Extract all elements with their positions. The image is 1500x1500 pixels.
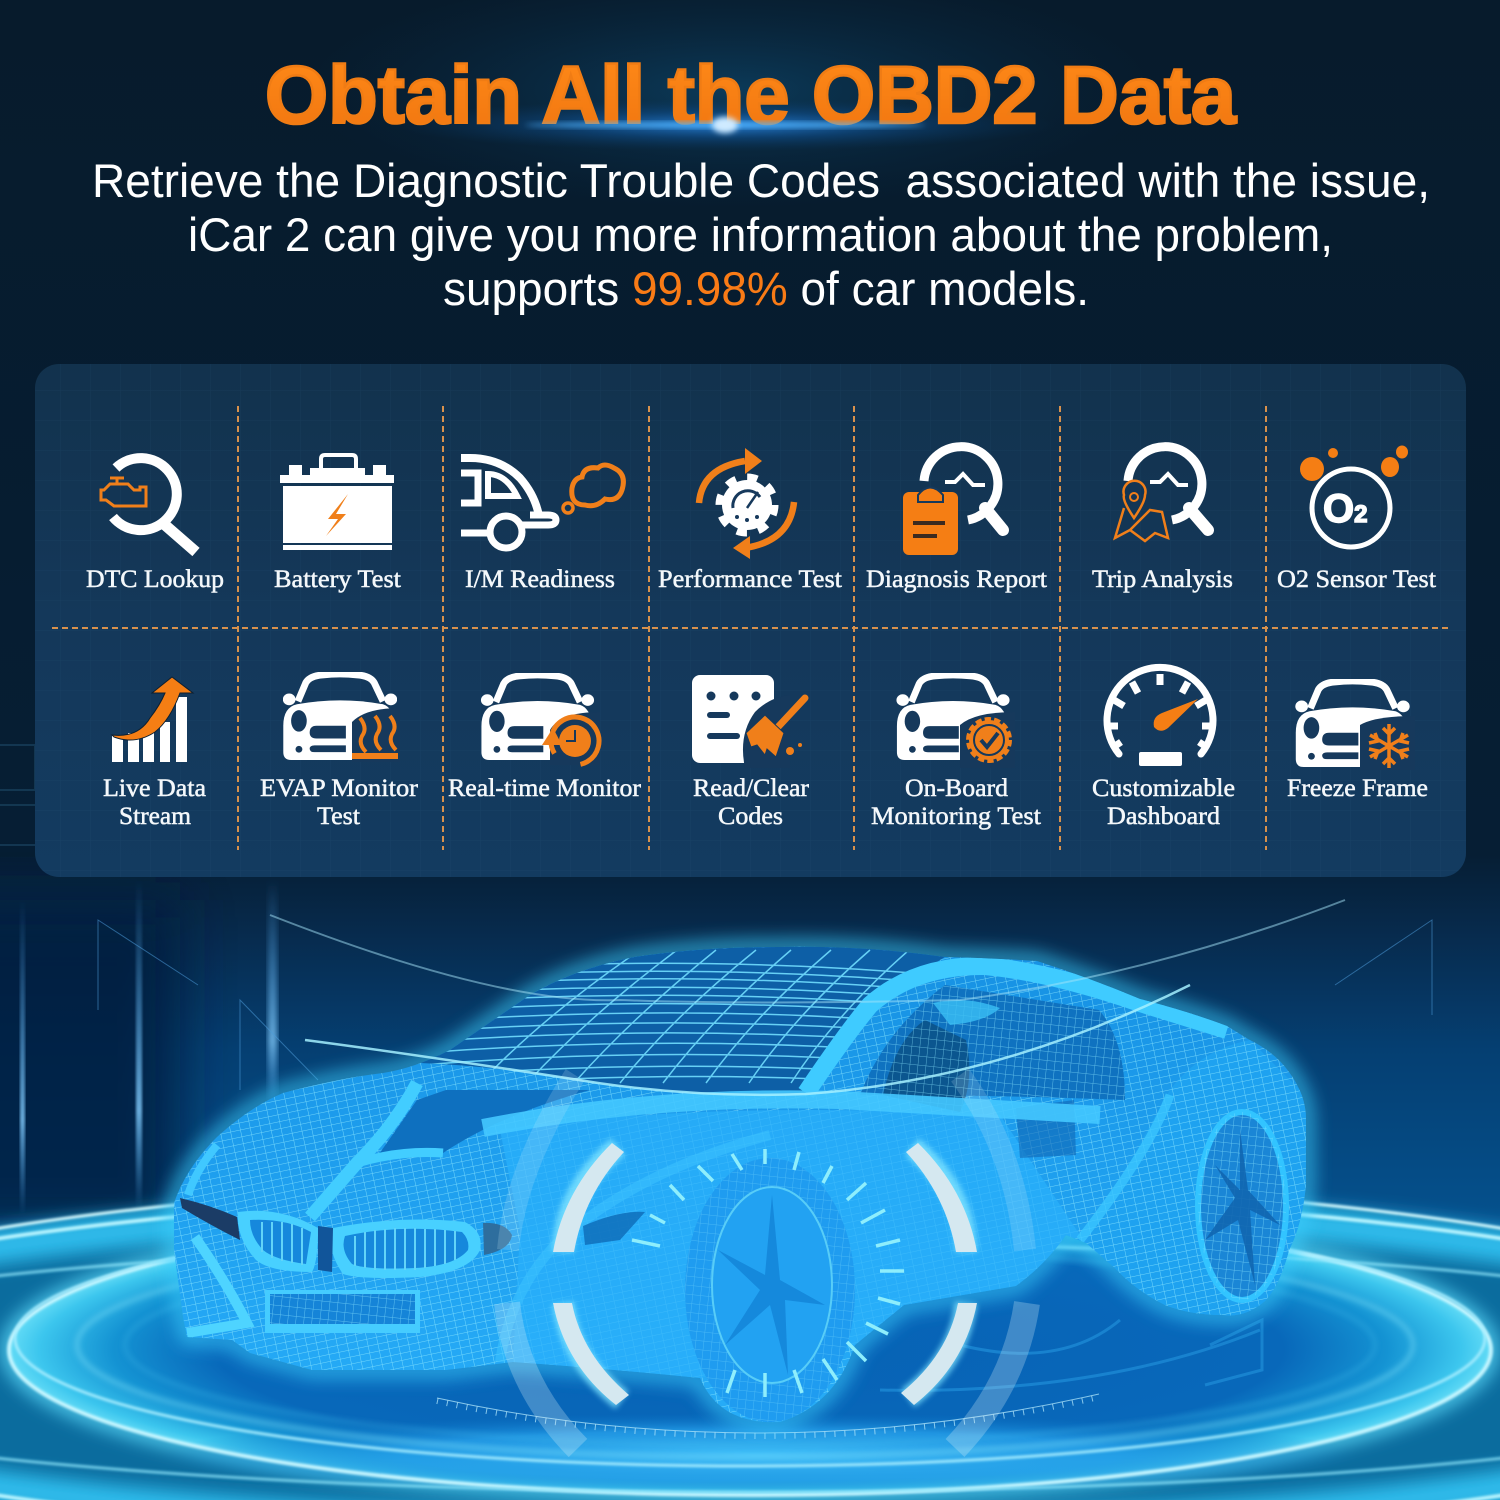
icon: trip analysis [1115, 447, 1208, 541]
floor tick arc [437, 1394, 1099, 1436]
label: I/M Readiness: I/M Readiness [465, 566, 615, 593]
HUD arcs and scanner [270, 900, 1345, 1448]
label: EVAP Monitor Test: EVAP Monitor [260, 775, 419, 802]
windshield [421, 946, 944, 1094]
icon: read clear codes [692, 675, 805, 768]
label: DTC Lookup: DTC Lookup [86, 566, 224, 593]
hood dark wedge [377, 1090, 590, 1157]
label: Live Data Stream [103, 775, 206, 830]
icon: DTC lookup [101, 458, 196, 552]
bright lower body [500, 1110, 1080, 1378]
rear haunch [1088, 1040, 1320, 1320]
label: Freeze Frame: Freeze Frame [1287, 775, 1428, 802]
icon: O2 sensor [1300, 446, 1408, 547]
headlights [180, 1198, 240, 1240]
label: O2 Sensor Test: O2 Sensor Test [1277, 566, 1436, 593]
label: Customizable Dashboard: Customizable [1092, 775, 1235, 802]
label: Trip Analysis: Trip Analysis [1092, 566, 1233, 593]
title flare back [395, 99, 1055, 151]
label: Battery Test: Battery Test [274, 566, 401, 593]
label: EVAP Monitor Test: Test [317, 803, 360, 830]
icon: diagnosis report [903, 447, 1003, 555]
floor rings [0, 1177, 1500, 1500]
label: Live Data Stream: Live Data [103, 775, 206, 802]
icon: customizable dashboard [1106, 667, 1214, 766]
icon: battery [280, 455, 394, 550]
label: Read/Clear Codes: Codes [718, 803, 783, 830]
label: Performance Test: Performance Test [658, 566, 842, 593]
icon: EVAP monitor [283, 674, 400, 762]
subtitle: iCar 2 can give you more information about the problem, [188, 208, 1333, 261]
grille [238, 1211, 481, 1278]
icon: on-board monitoring [896, 675, 1015, 768]
label: On-Board Monitoring Test: Monitoring Test [871, 803, 1041, 830]
icon: real-time monitor [481, 675, 608, 774]
label: On-Board Monitoring Test: On-Board [905, 775, 1009, 802]
label: On-Board Monitoring Test [871, 775, 1041, 830]
subtitle: supports 99.98% of car models. [443, 262, 1089, 315]
icon: live data stream [112, 677, 193, 762]
label: Real-time Monitor: Real-time Monitor [448, 775, 642, 802]
bright bands [806, 966, 1227, 1093]
label: Customizable Dashboard: Dashboard [1107, 803, 1221, 830]
front wheel [685, 1158, 855, 1422]
label: Live Data Stream: Stream [119, 803, 192, 830]
side glass and rear quarter [860, 985, 1125, 1158]
label: Read/Clear Codes [693, 775, 810, 830]
icon: I/M readiness [461, 458, 623, 548]
car wireframe [160, 930, 1330, 1440]
lower intake [265, 1290, 420, 1333]
label: Customizable Dashboard [1092, 775, 1235, 830]
icon: freeze frame [1295, 681, 1415, 770]
light streaks [20, 880, 1432, 1215]
label: Diagnosis Report: Diagnosis Report [866, 566, 1047, 593]
title flare front [525, 117, 925, 133]
label: Read/Clear Codes: Read/Clear [693, 775, 810, 802]
rear wheel [1186, 1082, 1302, 1308]
panel: features [35, 364, 1466, 877]
icon: O2 sensor: O2 [1323, 487, 1367, 531]
subtitle: Retrieve the Diagnostic Trouble Codes associated with the issue, [92, 154, 1430, 207]
label: EVAP Monitor Test [260, 775, 419, 830]
subtitle [92, 154, 1430, 315]
icon: performance test [699, 448, 794, 559]
title: Obtain All the OBD2 Data [265, 50, 1237, 141]
